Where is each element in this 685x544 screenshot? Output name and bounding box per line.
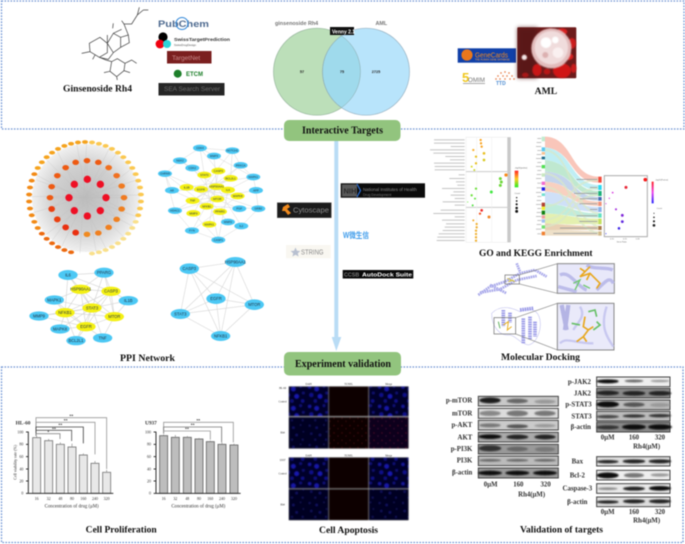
chart: PPI network of 14 core targets: MMP9 bbox=[33, 313, 46, 318]
banner: Interactive Targets: Interactive Targets bbox=[302, 124, 384, 136]
logo: NIH National Institutes of Health: NIH bbox=[344, 186, 356, 196]
chart: western blots JAK2/STAT3: Rh4(μM) bbox=[633, 443, 660, 450]
chart: PPI network with yellow hub nodes: NFKB1 bbox=[202, 204, 212, 208]
chart: PPI network with yellow hub nodes: PGF bbox=[236, 207, 242, 211]
chart: PPI network with yellow hub nodes: CHRM3 bbox=[160, 172, 170, 176]
logo: SwissTargetPrediction: SwissTargetPrediction bbox=[174, 37, 230, 43]
logo: GeneCards bbox=[458, 48, 516, 63]
image: molecular docking complex 1 bbox=[478, 263, 614, 295]
chart: U937 cell viability bars: 240 bbox=[219, 496, 225, 501]
chart: U937 cell viability bars: U937 bbox=[145, 420, 157, 426]
image: apoptosis fluorescence panels bbox=[279, 383, 409, 520]
chart: Venn diagram: 2725 bbox=[372, 70, 380, 74]
logo: OMIM: OMIM bbox=[468, 77, 485, 84]
chart: KEGG bubble plot: -log10(Pvalue) bbox=[655, 179, 668, 181]
chart: PPI network with yellow hub nodes: CDK4 bbox=[196, 146, 204, 150]
heading: Cell Apoptosis: Cell Apoptosis bbox=[319, 526, 378, 536]
heading: GO and KEGG Enrichment: GO and KEGG Enrichment bbox=[479, 249, 593, 259]
chart: HL-60 cell viability bars: Cell viability rate (%) bbox=[13, 444, 18, 480]
chart: U937 cell viability bars: ** bbox=[185, 427, 189, 432]
arrow: workflow down arrow bbox=[332, 141, 341, 351]
chart: HL-60 cell viability bars: ** bbox=[69, 413, 73, 418]
banner: Experiment validation bbox=[284, 352, 401, 376]
chart: western blots mTOR/AKT/PI3K: β-actin bbox=[452, 470, 473, 477]
image: apoptosis fluorescence panels: TUNEL bbox=[344, 454, 353, 457]
heading: PPI Network: PPI Network bbox=[120, 354, 176, 364]
chart: U937 cell viability bars: 48 bbox=[185, 496, 189, 501]
image: apoptosis fluorescence panels: Rh4 bbox=[280, 503, 286, 506]
logo: CCSB AutoDock Suite: CCSB bbox=[344, 273, 359, 279]
chart: PPI network with yellow hub nodes: MAPK1 bbox=[205, 222, 215, 226]
image: apoptosis fluorescence panels: TUNEL bbox=[344, 383, 353, 386]
chart: PPI network with yellow hub nodes: IL1B bbox=[184, 185, 190, 189]
chart: PPI network with yellow hub nodes: CASP1 bbox=[214, 238, 223, 242]
chart: PPI network of 14 core targets: MAPK8 bbox=[53, 326, 68, 331]
logo: SwissTargetPrediction: SwissDrugDesign bbox=[174, 43, 197, 47]
chart: PPI network with yellow hub nodes: IL6 bbox=[226, 188, 230, 192]
chart: western blots JAK2/STAT3: 160 bbox=[629, 434, 640, 441]
image: apoptosis fluorescence panels: Control bbox=[279, 472, 287, 475]
chart: PPI network of 14 core targets: EGFR bbox=[80, 324, 92, 329]
chart: Venn diagram bbox=[274, 21, 410, 115]
chart: PPI network of 14 core targets: HSP90AA1 bbox=[70, 287, 92, 292]
chart: HL-60 cell viability bars: 160 bbox=[80, 496, 86, 501]
logo: STRING bbox=[286, 245, 331, 258]
chart: KEGG Sankey diagram bbox=[536, 137, 602, 236]
chart: western blots Bax/Bcl-2/Caspase-3 bbox=[563, 457, 671, 524]
chart: PPI network of 6 hub targets bbox=[171, 257, 264, 341]
chart: HL-60 cell viability bars: 20 bbox=[19, 478, 23, 483]
chart: PPI network with yellow hub nodes: FYN bbox=[189, 229, 195, 233]
chart: HL-60 cell viability bars: ** bbox=[64, 418, 68, 423]
logo: OMIM: 5 bbox=[462, 70, 469, 85]
chart: western blots JAK2/STAT3: p-JAK2 bbox=[568, 379, 592, 386]
chart: western blots JAK2/STAT3: STAT3 bbox=[571, 413, 592, 420]
image: AML blood cell bbox=[517, 27, 576, 78]
chart: western blots mTOR/AKT/PI3K: 160 bbox=[513, 482, 524, 489]
chart: U937 cell viability bars: 20 bbox=[147, 478, 151, 483]
chart: Venn diagram: 57 bbox=[300, 70, 304, 74]
chart: U937 cell viability bars: 40 bbox=[147, 466, 151, 471]
chart: HL-60 cell viability bars: 60 bbox=[19, 454, 23, 459]
chart: western blots Bax/Bcl-2/Caspase-3: Caspase-3 bbox=[563, 485, 593, 492]
chart: western blots mTOR/AKT/PI3K bbox=[446, 396, 558, 499]
chart: PPI network of 14 core targets: BCL2L1 bbox=[68, 338, 84, 343]
chart: PPI network with yellow hub nodes: CDK2 bbox=[189, 166, 197, 170]
chart: western blots mTOR/AKT/PI3K: p-AKT bbox=[451, 422, 473, 429]
chart: western blots Bax/Bcl-2/Caspase-3: 320 bbox=[655, 509, 666, 516]
chart: Venn diagram: Venny 2.1 bbox=[332, 29, 355, 35]
image: apoptosis fluorescence panels: HL-60 bbox=[279, 387, 287, 390]
chart: U937 cell viability bars: 80 bbox=[147, 442, 151, 447]
chart: PPI network of 14 core targets: MTOR bbox=[108, 314, 120, 319]
chart: Venn diagram: AML bbox=[376, 21, 388, 27]
chart: western blots mTOR/AKT/PI3K: mTOR bbox=[452, 410, 472, 417]
chart: U937 cell viability bars: ** bbox=[196, 418, 200, 423]
chart: western blots mTOR/AKT/PI3K: Rh4(μM) bbox=[518, 492, 545, 499]
chart: PPI network with yellow hub nodes: MAPK1 bbox=[249, 175, 259, 179]
panel: bottom section border bbox=[2, 367, 683, 542]
logo: CCSB AutoDock Suite bbox=[343, 270, 413, 279]
chart: U937 cell viability bars: 16 bbox=[162, 496, 166, 501]
logo: W microbioinformatics: W微生信 bbox=[343, 230, 369, 240]
logo: Cytoscape bbox=[277, 203, 331, 218]
chart: PPI network of 14 core targets: TNF bbox=[99, 335, 107, 340]
logo: ETCM bbox=[174, 70, 203, 78]
chart: Venn diagram: ginsenoside Rh4 bbox=[275, 21, 318, 27]
chart: PPI network with yellow hub nodes bbox=[158, 145, 265, 243]
chart: GO enrichment dot plot: -log10(pvalue) bbox=[515, 168, 528, 170]
chart: KEGG bubble plot: 0.10 bbox=[610, 238, 615, 240]
image: apoptosis fluorescence panels: Merge bbox=[385, 383, 393, 386]
chart: U937 cell viability bars: 160 bbox=[207, 496, 213, 501]
panel: top section border bbox=[2, 1, 684, 129]
image: apoptosis fluorescence panels: Merge bbox=[385, 454, 393, 457]
logo: SEA Search Server bbox=[158, 83, 224, 96]
banner: Experiment validation: Experiment validation bbox=[295, 358, 391, 370]
chart: U937 cell viability bars bbox=[145, 418, 241, 509]
chart: KEGG bubble plot: 0.20 bbox=[636, 238, 640, 240]
image: apoptosis fluorescence panels: DAPI bbox=[306, 454, 312, 457]
chart: HL-60 cell viability bars: ** bbox=[58, 423, 62, 428]
logo: GeneCards: THE HUMAN GENE DATABASE bbox=[475, 58, 510, 62]
chart: KEGG bubble plot: Count bbox=[657, 207, 662, 210]
chart: HL-60 cell viability bars: * bbox=[47, 430, 49, 435]
image: apoptosis fluorescence panels: DAPI bbox=[306, 383, 312, 386]
chart: HL-60 cell viability bars bbox=[13, 413, 113, 509]
chart: PPI network with yellow hub nodes: MMP3 bbox=[210, 154, 218, 158]
logo: NIH National Institutes of Health bbox=[341, 183, 425, 198]
chart: PPI network of 14 core targets bbox=[29, 268, 138, 345]
heading: Molecular Docking: Molecular Docking bbox=[501, 353, 580, 363]
chart: PPI network with yellow hub nodes: MMP2 bbox=[224, 220, 232, 224]
chart: western blots JAK2/STAT3: 0μM bbox=[601, 434, 615, 441]
chart: PPI network with yellow hub nodes: AR bbox=[170, 188, 174, 192]
image: apoptosis fluorescence panels: Control bbox=[279, 401, 287, 404]
logo: STRING: STRING bbox=[301, 248, 324, 256]
chart: HL-60 cell viability bars: 48 bbox=[58, 496, 62, 501]
chart: PPI full circular network bbox=[26, 140, 144, 255]
logo: ETCM: ETCM bbox=[186, 72, 203, 78]
logo: Cytoscape: Cytoscape bbox=[293, 206, 329, 214]
chart: western blots JAK2/STAT3 bbox=[565, 377, 672, 450]
chart: HL-60 cell viability bars: 80 bbox=[19, 442, 23, 447]
chart: PPI network with yellow hub nodes: EGFR bbox=[197, 187, 205, 191]
chart: HL-60 cell viability bars: 100 bbox=[17, 429, 23, 434]
logo: NIH National Institutes of Health: National Institutes of Health bbox=[363, 187, 417, 192]
heading: Validation of targets: Validation of targets bbox=[520, 526, 603, 536]
logo: TTD bbox=[495, 71, 515, 87]
chart: western blots mTOR/AKT/PI3K: p-mTOR bbox=[446, 398, 472, 405]
logo: GeneCards: GeneCards bbox=[475, 50, 508, 60]
chart: HL-60 cell viability bars: ** bbox=[52, 426, 56, 431]
chart: KEGG bubble plot: Gene Ratio bbox=[617, 240, 628, 243]
chart: PPI network of 14 core targets: NFKB1 bbox=[58, 310, 72, 315]
chart: western blots JAK2/STAT3: p-STAT3 bbox=[565, 402, 592, 409]
chart: western blots mTOR/AKT/PI3K: AKT bbox=[458, 434, 473, 441]
chart: PPI network with yellow hub nodes: MAPK8 bbox=[233, 194, 243, 198]
chart: HL-60 cell viability bars: 80 bbox=[70, 496, 74, 501]
chart: PPI network of 6 hub targets: MTOR bbox=[248, 302, 260, 307]
chart: PPI network with yellow hub nodes: HDAC1 bbox=[170, 209, 180, 213]
chart: PPI network with yellow hub nodes: BCL2L1 bbox=[226, 176, 236, 180]
chart: western blots Bax/Bcl-2/Caspase-3: Bax bbox=[572, 459, 584, 466]
chart: PPI network of 14 core targets: IL6 bbox=[65, 272, 72, 277]
image: molecular docking complex 2 bbox=[492, 303, 614, 350]
chart: western blots Bax/Bcl-2/Caspase-3: Bcl-2 bbox=[570, 472, 585, 479]
chart: PPI network of 6 hub targets: NFKB1 bbox=[214, 333, 228, 338]
logo: SEA Search Server: SEA Search Server bbox=[164, 86, 221, 93]
chart: western blots Bax/Bcl-2/Caspase-3: Rh4(μM) bbox=[633, 517, 660, 524]
chart: PPI network of 6 hub targets: EGFR bbox=[210, 296, 222, 301]
chart: western blots JAK2/STAT3: 320 bbox=[655, 434, 666, 441]
logo: NIH National Institutes of Health: Drug Development bbox=[363, 193, 391, 197]
chart: PPI network with yellow hub nodes: NEK2 bbox=[176, 159, 184, 163]
chart: PPI network of 14 core targets: CASP3 bbox=[104, 289, 118, 294]
chart: PPI network of 14 core targets: PPARG bbox=[97, 270, 111, 275]
chart: western blots JAK2/STAT3: β-actin bbox=[571, 424, 591, 431]
chart: U937 cell viability bars: ** bbox=[191, 423, 195, 428]
chart: KEGG bubble plot bbox=[604, 176, 668, 243]
chart: PPI network with yellow hub nodes: GRB2 bbox=[254, 207, 263, 211]
chart: PPI network of 14 core targets: IL1B bbox=[124, 298, 133, 303]
chart: western blots mTOR/AKT/PI3K: 320 bbox=[541, 482, 551, 489]
chart: GO enrichment dot plot bbox=[430, 137, 528, 242]
chart: HL-60 cell viability bars: HL-60 bbox=[16, 420, 31, 426]
chart: HL-60 cell viability bars: Concentration of drug (μM) bbox=[45, 504, 99, 509]
chart: western blots mTOR/AKT/PI3K: p-PI3K bbox=[451, 446, 473, 453]
chart: western blots mTOR/AKT/PI3K: PI3K bbox=[457, 458, 473, 465]
chart: Venn diagram: 75 bbox=[340, 70, 344, 74]
chart: U937 cell viability bars: Concentration of drug (μM) bbox=[171, 504, 226, 509]
chart: PPI network with yellow hub nodes: STAT3 bbox=[200, 173, 209, 177]
chart: PPI network with yellow hub nodes: MMP9 bbox=[189, 211, 198, 215]
chart: PPI network with yellow hub nodes: PPARG bbox=[215, 210, 225, 214]
chart: PPI network of 14 core targets: STAT3 bbox=[86, 305, 99, 310]
chart: PPI network with yellow hub nodes: CASP3 bbox=[214, 169, 223, 173]
logo: TargetNet bbox=[167, 51, 212, 64]
chart: HL-60 cell viability bars: 40 bbox=[19, 466, 23, 471]
chart: PPI network of 6 hub targets: CASP3 bbox=[182, 266, 197, 271]
chart: HL-60 cell viability bars: 32 bbox=[47, 496, 51, 501]
chart: HL-60 cell viability bars: 16 bbox=[35, 496, 39, 501]
logo: CCSB AutoDock Suite: AutoDock Suite bbox=[362, 273, 412, 279]
chart: PPI network with yellow hub nodes: IL2 bbox=[239, 224, 244, 228]
chart: U937 cell viability bars: 100 bbox=[145, 429, 151, 434]
chart: western blots JAK2/STAT3: JAK2 bbox=[574, 390, 592, 397]
chart: PPI network with yellow hub nodes: MTOR bbox=[213, 197, 221, 201]
logo: SwissTargetPrediction bbox=[156, 32, 230, 48]
chart: HL-60 cell viability bars: 240 bbox=[92, 496, 98, 501]
chart: GO enrichment dot plot: Count bbox=[515, 192, 520, 195]
chart: western blots Bax/Bcl-2/Caspase-3: β-actin bbox=[567, 499, 588, 506]
chart: western blots mTOR/AKT/PI3K: 0μM bbox=[484, 482, 498, 489]
banner: Interactive Targets bbox=[284, 120, 400, 141]
chart: PPI network with yellow hub nodes: TNF bbox=[190, 199, 196, 203]
chart: HL-60 cell viability bars: 0 bbox=[21, 491, 23, 496]
chart: PPI network with yellow hub nodes: APP bbox=[253, 188, 259, 192]
chart: U937 cell viability bars: 60 bbox=[147, 454, 151, 459]
chart: KEGG bubble plot: 0.15 bbox=[623, 238, 628, 240]
chart: PPI network with yellow hub nodes: PRKCA bbox=[236, 163, 246, 167]
heading: AML: AML bbox=[535, 87, 557, 97]
chart: PPI network of 6 hub targets: STAT3 bbox=[174, 311, 187, 316]
logo: TTD: TTD bbox=[496, 81, 506, 87]
chart: western blots Bax/Bcl-2/Caspase-3: 0μM bbox=[601, 509, 615, 516]
chart: U937 cell viability bars: 80 bbox=[197, 496, 201, 501]
chart: PPI network of 14 core targets: MAPK1 bbox=[47, 297, 62, 302]
heading: Cell Proliferation: Cell Proliferation bbox=[86, 526, 157, 536]
chart: HL-60 cell viability bars: 320 bbox=[104, 496, 110, 501]
logo: TargetNet: TargetNet bbox=[172, 55, 200, 62]
logo: OMIM bbox=[462, 70, 485, 85]
image: apoptosis fluorescence panels: U937 bbox=[280, 459, 286, 462]
chart: U937 cell viability bars: 320 bbox=[231, 496, 237, 501]
logo: PubChem: PubChem bbox=[158, 19, 209, 30]
heading: Ginsenoside Rh4: Ginsenoside Rh4 bbox=[63, 84, 132, 94]
chart: PPI network with yellow hub nodes: NOTCH1 bbox=[226, 149, 239, 153]
icon: ginsenoside Rh4 chemical structure bbox=[82, 7, 148, 80]
chart: U937 cell viability bars: 0 bbox=[149, 491, 151, 496]
chart: western blots Bax/Bcl-2/Caspase-3: 160 bbox=[629, 509, 640, 516]
chart: PPI network with yellow hub nodes: HSP90AA1 bbox=[209, 185, 224, 189]
chart: U937 cell viability bars: 32 bbox=[173, 496, 177, 501]
chart: PPI network of 6 hub targets: HSP90AA1 bbox=[225, 259, 247, 264]
image: apoptosis fluorescence panels: Rh4 bbox=[280, 432, 286, 435]
